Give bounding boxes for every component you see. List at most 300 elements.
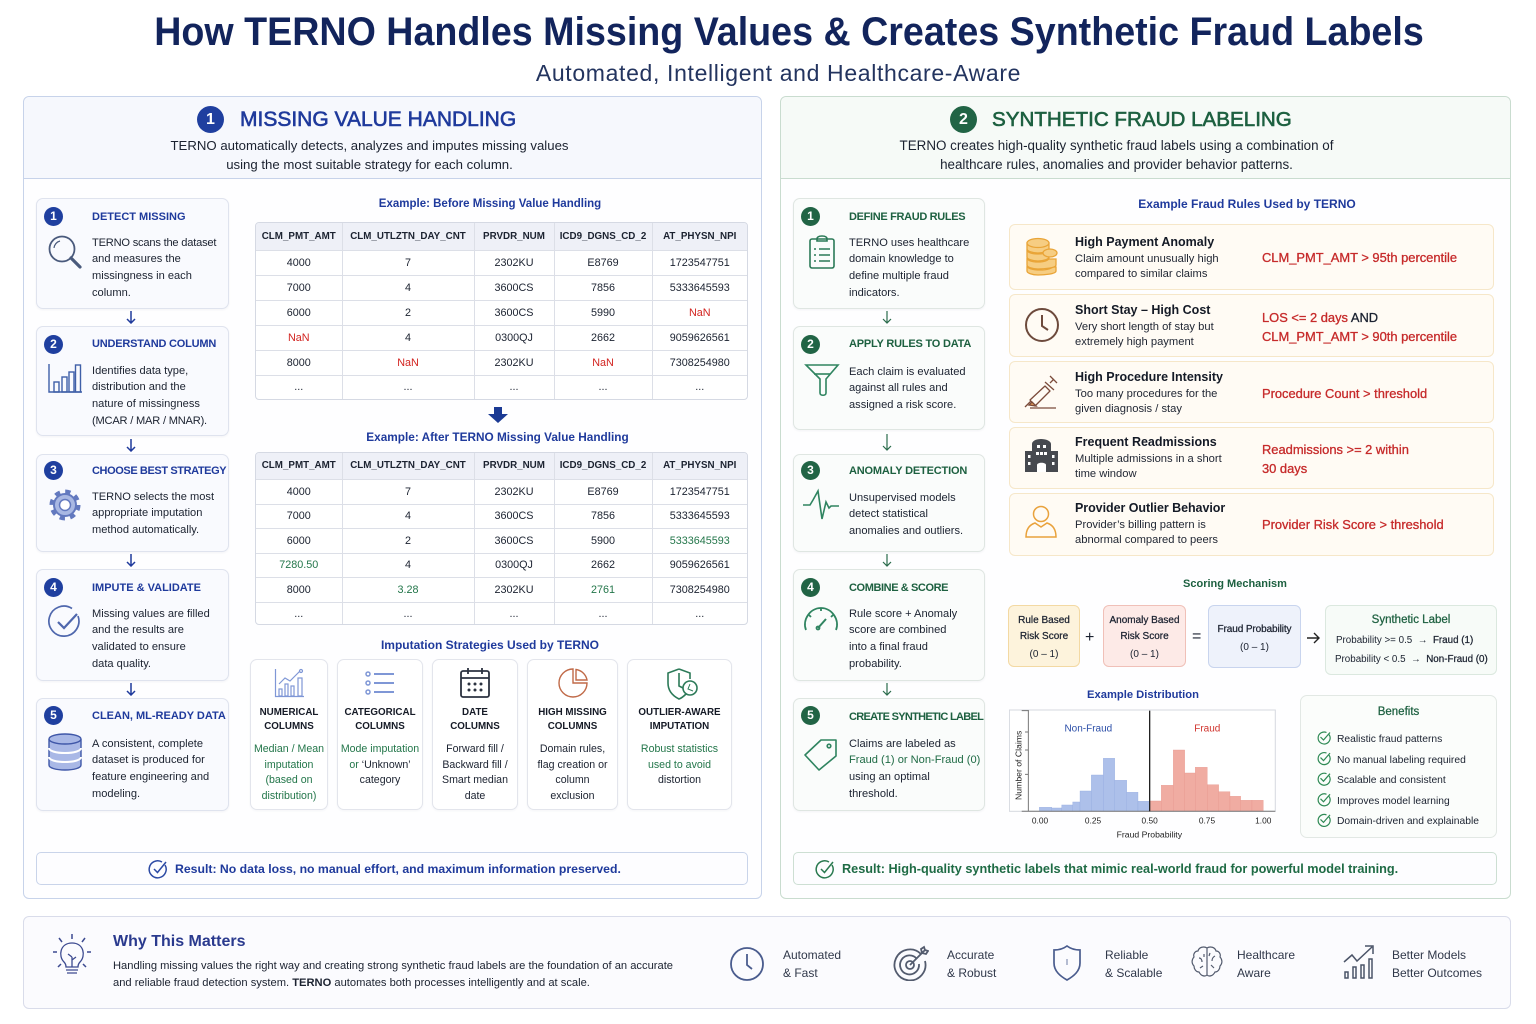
panel: synthetic fraud labeling: [780, 96, 1511, 899]
benefit: accurate and robust: Accurate: [947, 948, 994, 962]
step: detect missing: DETECT MISSING: [92, 211, 186, 223]
step: create synthetic label: 5: [807, 708, 814, 722]
description: TERNO automatically detects, analyzes and imputes missing values: [170, 138, 568, 153]
step: combine and score: probability.: [849, 658, 902, 670]
table: before missing value handling: PRVDR_NUM: [483, 231, 545, 242]
description: and reliable fraud detection system. TERNO automates both processes intelligently and at scale.: [113, 976, 590, 988]
strategy: high missing columns: COLUMNS: [548, 721, 597, 732]
table: before missing value handling: 4: [405, 332, 411, 344]
table: after missing value handling: ...: [598, 608, 608, 620]
strategy: high missing columns: HIGH MISSING: [538, 707, 607, 718]
check icons: [1318, 731, 1331, 827]
table: after missing value handling: 4: [405, 559, 411, 571]
icon: target: [893, 945, 929, 981]
icon: check: [148, 860, 167, 879]
step: clean ML-ready data: modeling.: [92, 788, 140, 800]
table: before missing value handling: 7308254980: [670, 356, 730, 368]
rule: high payment anomaly: compared to similar claims: [1075, 268, 1207, 280]
step: impute and validate: IMPUTE & VALIDATE: [92, 582, 201, 594]
benefit list: Domain-driven and explainable: [1337, 816, 1479, 827]
arrow: [882, 554, 892, 567]
description: [900, 138, 1334, 172]
icon: person: [1025, 506, 1057, 538]
table: after missing value handling: [255, 452, 748, 625]
plus sign: +: [1085, 629, 1094, 646]
result bar: missing values: [36, 852, 748, 885]
icon: check: [815, 860, 834, 879]
heading: scoring mechanism: Scoring Mechanism: [1183, 578, 1287, 590]
arrow: to synthetic label: [1307, 632, 1320, 644]
strategy: date columns: Smart median: [442, 774, 508, 786]
strategy: numerical columns: COLUMNS: [264, 721, 314, 732]
fraud bars: [1149, 750, 1263, 812]
step: anomaly detection: Unsupervised models: [849, 492, 956, 504]
chart: fraud probability histogram: Fraud: [1194, 724, 1220, 735]
number badge 1: [197, 106, 224, 133]
step: combine and score: COMBINE & SCORE: [849, 582, 948, 594]
icon: funnel: [804, 364, 840, 396]
rule: high procedure intensity: given diagnosis / stay: [1075, 403, 1182, 415]
step: apply rules to data: against all rules and: [849, 382, 948, 394]
table: before missing value handling: AT_PHYSN_NPI: [663, 231, 736, 242]
table: after missing value handling: 6000: [287, 534, 311, 546]
strategy: date columns: Backward fill /: [442, 759, 508, 771]
rule: high payment anomaly: [1009, 224, 1494, 290]
benefit: better models: [1343, 946, 1493, 982]
table: before missing value handling: NaN: [689, 306, 711, 318]
strategy: outlier-aware imputation: distortion: [658, 774, 701, 786]
rule: frequent readmissions: [1009, 427, 1494, 489]
icon: coins: [1026, 238, 1058, 276]
strategy: categorical columns: COLUMNS: [355, 721, 405, 732]
icon: gauge: [804, 607, 838, 630]
benefit: healthcare aware: [1191, 946, 1301, 982]
table: before missing value handling: ...: [294, 381, 303, 393]
chart: fraud probability histogram: 1.00: [1255, 816, 1272, 826]
arrow: [882, 434, 892, 451]
heading: after table: Example: After TERNO Missing Value Handling: [366, 430, 629, 444]
rule: frequent readmissions: Multiple admissions in a short: [1075, 453, 1222, 465]
step: create synthetic label: CREATE SYNTHETIC LABEL: [849, 711, 983, 723]
description: TERNO creates high-quality synthetic fraud labels using a combination of: [900, 138, 1333, 153]
chart: fraud probability histogram: Number of Claims: [1014, 730, 1024, 800]
benefit: better models: Better Models: [1392, 948, 1466, 962]
table: after missing value handling: 4: [405, 510, 411, 522]
table: after missing value handling: E8769: [587, 486, 619, 498]
rule: frequent readmissions: Readmissions >= 2 within: [1262, 442, 1409, 457]
rule: high payment anomaly: Claim amount unusually high: [1075, 253, 1219, 265]
non-fraud bars: [1039, 759, 1149, 812]
rule: provider outlier behavior: Provider Outlier Behavior: [1075, 501, 1225, 515]
scoring: rule based risk score: (0 – 1): [1030, 649, 1058, 660]
step: combine and score: Rule score + Anomaly: [849, 608, 957, 620]
step: understand column: distribution and the: [92, 381, 186, 393]
heading: example distribution: Example Distribution: [1087, 688, 1199, 700]
table: after missing value handling: ...: [510, 608, 518, 620]
table: before missing value handling: ICD9_DGNS_CD_2: [560, 231, 646, 242]
step: impute and validate: [36, 569, 229, 681]
step: understand column: (MCAR / MAR / MNAR).: [92, 415, 207, 427]
table: after missing value handling: 2302KU: [494, 584, 534, 596]
table: after missing value handling: 5333645593: [670, 510, 730, 522]
table: before missing value handling: E8769: [587, 256, 619, 268]
benefit list: [1337, 734, 1479, 827]
icon: bar chart: [48, 364, 82, 393]
table: after missing value handling: 1723547751: [670, 486, 730, 498]
chart: fraud probability histogram: 0.00: [1032, 816, 1048, 826]
step: combine and score: score are combined: [849, 624, 946, 636]
table: before missing value handling: 1723547751: [670, 256, 730, 268]
icon: brain: [1191, 946, 1223, 979]
table: before missing value handling: ...: [695, 381, 704, 393]
rule: short stay high cost: CLM_PMT_AMT > 90th percentile: [1262, 329, 1457, 344]
strategy: categorical columns: CATEGORICAL: [344, 707, 416, 718]
arrow: [882, 683, 892, 696]
benefits box: [1300, 695, 1497, 838]
scoring: rule based risk score: Rule Based: [1018, 615, 1070, 626]
table: after missing value handling: 7856: [591, 510, 615, 522]
icon: shield: [1052, 945, 1082, 981]
benefit list: Improves model learning: [1337, 796, 1450, 807]
step: detect missing: column.: [92, 287, 131, 299]
title: How TERNO Handles Missing Values & Creates Synthetic Fraud Labels: [154, 9, 1424, 54]
rule: high procedure intensity: Too many procedures for the: [1075, 388, 1217, 400]
rule: high payment anomaly: High Payment Anomaly: [1075, 235, 1214, 249]
table: after missing value handling: 3600CS: [494, 534, 534, 546]
benefit: reliable and scalable: & Scalable: [1105, 966, 1162, 980]
scoring: fraud probability: [1208, 605, 1301, 668]
panel header: [24, 97, 761, 179]
step: clean ML-ready data: [36, 698, 229, 811]
icon: calendar: [460, 668, 490, 698]
result bar: missing values: Result: No data loss, no manual effort, and maximum information preserved.: [175, 862, 621, 876]
rule: frequent readmissions: 30 days: [1262, 461, 1307, 476]
table: before missing value handling: 9059626561: [670, 332, 730, 344]
icon: growth chart: [1343, 945, 1375, 979]
icon: light bulb: [53, 934, 91, 974]
bottom panel: why this matters: [23, 916, 1511, 1009]
table: before missing value handling: 2302KU: [494, 256, 534, 268]
step: understand column: nature of missingness: [92, 398, 200, 410]
table: after missing value handling: 2761: [591, 584, 615, 596]
arrow: [126, 554, 136, 567]
rule: provider outlier behavior: [1009, 493, 1494, 556]
icon: tag: [804, 739, 837, 771]
step: impute and validate: Missing values are filled: [92, 608, 210, 620]
step: create synthetic label: [793, 698, 985, 811]
table: before missing value handling: ...: [598, 381, 608, 393]
scoring: synthetic label: Probability >= 0.5 → Fraud (1): [1336, 635, 1473, 646]
heading: MISSING VALUE HANDLING: [240, 108, 516, 131]
chart: fraud probability histogram: 0.75: [1199, 816, 1215, 826]
table: before missing value handling: ...: [510, 381, 518, 393]
table: before missing value handling: 0300QJ: [495, 332, 533, 344]
step: understand column: UNDERSTAND COLUMN: [92, 338, 216, 350]
table: after missing value handling: 4000: [287, 486, 311, 498]
table: after missing value handling: 2662: [591, 559, 615, 571]
scoring: synthetic label: Probability < 0.5 → Non-Fraud (0): [1335, 654, 1488, 665]
strategy: numerical columns: distribution): [262, 790, 316, 802]
chart: fraud probability histogram: 0.25: [1085, 816, 1101, 826]
icon: pie chart: [558, 668, 588, 698]
step: combine and score: [793, 569, 985, 681]
arrow: [126, 311, 136, 324]
table: before missing value handling: [255, 222, 748, 400]
step: define fraud rules: [793, 198, 985, 309]
step: create synthetic label: Fraud (1) or Non-Fraud (0): [849, 754, 980, 766]
step: define fraud rules: define multiple fraud: [849, 270, 949, 282]
benefit: reliable and scalable: [1052, 946, 1177, 982]
rule: frequent readmissions: time window: [1075, 468, 1137, 480]
table: before missing value handling: 3600CS: [494, 282, 534, 294]
step: define fraud rules: domain knowledge to: [849, 253, 954, 265]
arrow: before to after: [488, 407, 508, 423]
table: before missing value handling: 5333645593: [670, 282, 730, 294]
step: create synthetic label: threshold.: [849, 788, 898, 800]
step: anomaly detection: detect statistical: [849, 508, 928, 520]
icon: pulse: [803, 488, 839, 520]
arrow: [882, 311, 892, 324]
number badge 2: [950, 106, 977, 133]
chart: fraud probability histogram: Non-Fraud: [1064, 724, 1112, 735]
chart: fraud probability histogram: [1009, 710, 1276, 840]
chart: fraud probability histogram: 0.50: [1142, 816, 1158, 826]
benefit list: Scalable and consistent: [1337, 775, 1446, 786]
benefit: accurate and robust: [893, 946, 1003, 982]
equals sign: =: [1192, 628, 1201, 645]
strategy: outlier-aware imputation: Robust statistics: [641, 743, 718, 755]
step: detect missing: TERNO scans the dataset: [92, 236, 216, 248]
step: combine and score: 4: [807, 580, 814, 594]
step: choose best strategy: 3: [50, 463, 57, 477]
benefit list: Realistic fraud patterns: [1337, 734, 1442, 745]
step: apply rules to data: APPLY RULES TO DATA: [849, 338, 971, 350]
step: detect missing: missingness in each: [92, 270, 192, 282]
icon: database: [48, 733, 82, 771]
step: choose best strategy: [36, 454, 229, 552]
strategy: outlier-aware imputation: used to avoid: [648, 759, 711, 771]
table: before missing value handling: 7856: [591, 282, 615, 294]
description: using the most suitable strategy for each column.: [226, 157, 513, 172]
step: apply rules to data: [793, 326, 985, 430]
subtitle: Automated, Intelligent and Healthcare-Aware: [536, 60, 1021, 86]
step: anomaly detection: ANOMALY DETECTION: [849, 465, 967, 477]
scoring: synthetic label: Synthetic Label: [1372, 614, 1450, 626]
step: apply rules to data: Each claim is evaluated: [849, 366, 966, 378]
table: after missing value handling: CLM_PMT_AMT: [262, 460, 336, 471]
scoring: fraud probability: (0 – 1): [1240, 642, 1269, 653]
benefit: healthcare aware: Healthcare: [1237, 948, 1295, 962]
step: choose best strategy: method automatically.: [92, 524, 199, 536]
step: apply rules to data: 2: [807, 337, 814, 351]
scoring: rule based risk score: [1008, 605, 1080, 667]
strategy: categorical columns: Mode imputation: [341, 743, 419, 755]
rule: high payment anomaly: CLM_PMT_AMT > 95th percentile: [1262, 250, 1457, 265]
result bar: synthetic labels: Result: High-quality synthetic labels that mimic real-world fraud for powerful model training.: [842, 862, 1398, 876]
benefit: accurate and robust: & Robust: [947, 966, 996, 980]
table: after missing value handling: 2: [405, 534, 411, 546]
benefit list: No manual labeling required: [1337, 755, 1466, 766]
icon: clock: [1025, 308, 1059, 342]
step: clean ML-ready data: A consistent, complete: [92, 738, 203, 750]
step: anomaly detection: [793, 454, 985, 552]
rule: provider outlier behavior: Provider’s billing pattern is: [1075, 519, 1206, 531]
strategy: numerical columns: Median / Mean: [254, 743, 324, 755]
step: impute and validate: and the results are: [92, 624, 184, 636]
scoring: anomaly based risk score: [1103, 605, 1186, 667]
scoring: anomaly based risk score: (0 – 1): [1130, 649, 1159, 660]
strategy: high missing columns: flag creation or: [537, 759, 608, 771]
table: before missing value handling: 6000: [287, 306, 311, 318]
rule: short stay high cost: Very short length of stay but: [1075, 321, 1214, 333]
table: after missing value handling: 0300QJ: [495, 559, 533, 571]
table: after missing value handling: ...: [695, 608, 704, 620]
heading: SYNTHETIC FRAUD LABELING: [992, 108, 1292, 131]
strategy: date columns: COLUMNS: [450, 721, 500, 732]
strategy: numerical columns: imputation: [265, 759, 313, 771]
strategy: high missing columns: exclusion: [550, 790, 595, 802]
heading: imputation strategies: Imputation Strategies Used by TERNO: [381, 638, 599, 652]
strategy: outlier-aware imputation: OUTLIER-AWARE: [638, 707, 721, 718]
table: before missing value handling: 4000: [287, 256, 311, 268]
scoring: anomaly based risk score: Risk Score: [1120, 630, 1169, 642]
table: after missing value handling: 7000: [287, 510, 311, 522]
table: before missing value handling: NaN: [592, 356, 614, 368]
rule: short stay high cost: extremely high payment: [1075, 336, 1194, 348]
table: after missing value handling: 5333645593: [670, 534, 730, 546]
step: understand column: Identifies data type,: [92, 364, 188, 376]
table: after missing value handling: AT_PHYSN_NPI: [663, 460, 736, 471]
step: clean ML-ready data: dataset is produced for: [92, 754, 205, 766]
table: before missing value handling: ...: [404, 381, 412, 393]
table: after missing value handling: 7308254980: [670, 584, 730, 596]
step: define fraud rules: TERNO uses healthcare: [849, 236, 969, 248]
description: [113, 960, 673, 988]
table: before missing value handling: 7: [405, 256, 411, 268]
scoring: synthetic label: [1325, 605, 1497, 675]
rule: provider outlier behavior: abnormal compared to peers: [1075, 534, 1218, 546]
icon: syringe: [1024, 376, 1058, 409]
table: before missing value handling: 5990: [591, 306, 615, 318]
table: after missing value handling: 3600CS: [494, 510, 534, 522]
number badge 1: 1: [206, 111, 215, 128]
strategy: outlier-aware imputation: [627, 659, 732, 810]
table: after missing value handling: 7280.50: [279, 559, 318, 571]
step: create synthetic label: Claims are labeled as: [849, 738, 956, 750]
step: impute and validate: data quality.: [92, 658, 151, 670]
strategy: high missing columns: Domain rules,: [540, 743, 605, 755]
icon: clock: [729, 946, 765, 982]
scoring: anomaly based risk score: Anomaly Based: [1109, 615, 1180, 626]
description: [170, 138, 568, 172]
table: after missing value handling: PRVDR_NUM: [483, 460, 545, 471]
description: healthcare rules, anomalies and provider behavior patterns.: [940, 157, 1293, 172]
table: before missing value handling: 4: [405, 282, 411, 294]
step: clean ML-ready data: CLEAN, ML-READY DATA: [92, 710, 226, 722]
chart: fraud probability histogram: Fraud Probability: [1117, 830, 1183, 840]
benefit: reliable and scalable: Reliable: [1105, 948, 1148, 962]
table: before missing value handling: CLM_PMT_AMT: [262, 231, 336, 242]
table: before missing value handling: NaN: [397, 356, 419, 368]
arrow: [126, 439, 136, 452]
strategy: date columns: [432, 659, 518, 810]
step: impute and validate: validated to ensure: [92, 641, 186, 653]
result bar: synthetic labels: [793, 852, 1497, 885]
table: after missing value handling: 2302KU: [494, 486, 534, 498]
icon: check circle: [48, 605, 80, 637]
table: before missing value handling: 2: [405, 306, 411, 318]
table: before missing value handling: NaN: [288, 332, 310, 344]
rule: high procedure intensity: Procedure Count > threshold: [1262, 386, 1427, 401]
strategy: numerical columns: [250, 659, 328, 810]
icon: shield and clock: [667, 668, 698, 700]
strategy: categorical columns: [337, 659, 423, 810]
step: detect missing: and measures the: [92, 253, 181, 265]
number badge 2: 2: [959, 111, 968, 128]
strategy: date columns: Forward fill /: [446, 743, 504, 755]
scoring: rule based risk score: Risk Score: [1020, 630, 1068, 642]
step: understand column: 2: [50, 337, 57, 351]
table: after missing value handling: 7: [405, 486, 411, 498]
step: define fraud rules: DEFINE FRAUD RULES: [849, 211, 965, 223]
strategy: categorical columns: category: [360, 774, 400, 786]
step: anomaly detection: anomalies and outliers.: [849, 525, 963, 537]
strategy: numerical columns: (based on: [265, 774, 313, 786]
strategy: high missing columns: [527, 659, 618, 810]
table: before missing value handling: CLM_UTLZTN_DAY_CNT: [350, 231, 466, 242]
table: before missing value handling: 2302KU: [494, 356, 534, 368]
step: choose best strategy: CHOOSE BEST STRATEGY: [92, 465, 226, 477]
strategy: categorical columns: or ‘Unknown’: [349, 759, 411, 771]
arrow: [126, 683, 136, 696]
step: combine and score: into a final fraud: [849, 641, 928, 653]
step: choose best strategy: TERNO selects the most: [92, 490, 214, 502]
table: before missing value handling: 7000: [287, 282, 311, 294]
step: define fraud rules: indicators.: [849, 287, 900, 299]
icon: clipboard: [809, 235, 835, 269]
step: understand column: [36, 326, 229, 436]
rule: short stay high cost: Short Stay – High Cost: [1075, 303, 1210, 317]
strategy: outlier-aware imputation: IMPUTATION: [650, 721, 709, 732]
step: anomaly detection: 3: [807, 463, 814, 477]
step: detect missing: 1: [50, 209, 57, 223]
benefit: automated and fast: [730, 947, 841, 981]
step: choose best strategy: appropriate imputation: [92, 507, 202, 519]
table: after missing value handling: 9059626561: [670, 559, 730, 571]
rule: high procedure intensity: [1009, 361, 1494, 423]
rule: provider outlier behavior: Provider Risk Score > threshold: [1262, 517, 1444, 532]
step: apply rules to data: assigned a risk score.: [849, 399, 956, 411]
table: after missing value handling: CLM_UTLZTN_DAY_CNT: [350, 460, 466, 471]
icon: growth chart: [274, 668, 304, 698]
benefit: automated and fast: Automated: [783, 948, 841, 962]
icon: magnifier: [48, 236, 82, 269]
step: clean ML-ready data: 5: [50, 708, 57, 722]
strategy: date columns: DATE: [462, 707, 488, 718]
icon: hospital: [1025, 439, 1058, 472]
step: define fraud rules: 1: [807, 209, 814, 223]
icon: list: [365, 671, 394, 695]
table: after missing value handling: ICD9_DGNS_CD_2: [560, 460, 646, 471]
table: after missing value handling: ...: [294, 608, 303, 620]
rule: short stay high cost: LOS <= 2 days AND: [1262, 310, 1378, 325]
heading: example fraud rules: Example Fraud Rules Used by TERNO: [1138, 197, 1356, 211]
description: Handling missing values the right way and creating strong synthetic fraud labels are the foundation of an accurate: [113, 960, 673, 972]
benefit: healthcare aware: Aware: [1237, 966, 1271, 980]
benefit: better models: Better Outcomes: [1392, 966, 1482, 980]
strategy: high missing columns: column: [555, 774, 590, 786]
benefits heading: Benefits: [1378, 706, 1419, 718]
